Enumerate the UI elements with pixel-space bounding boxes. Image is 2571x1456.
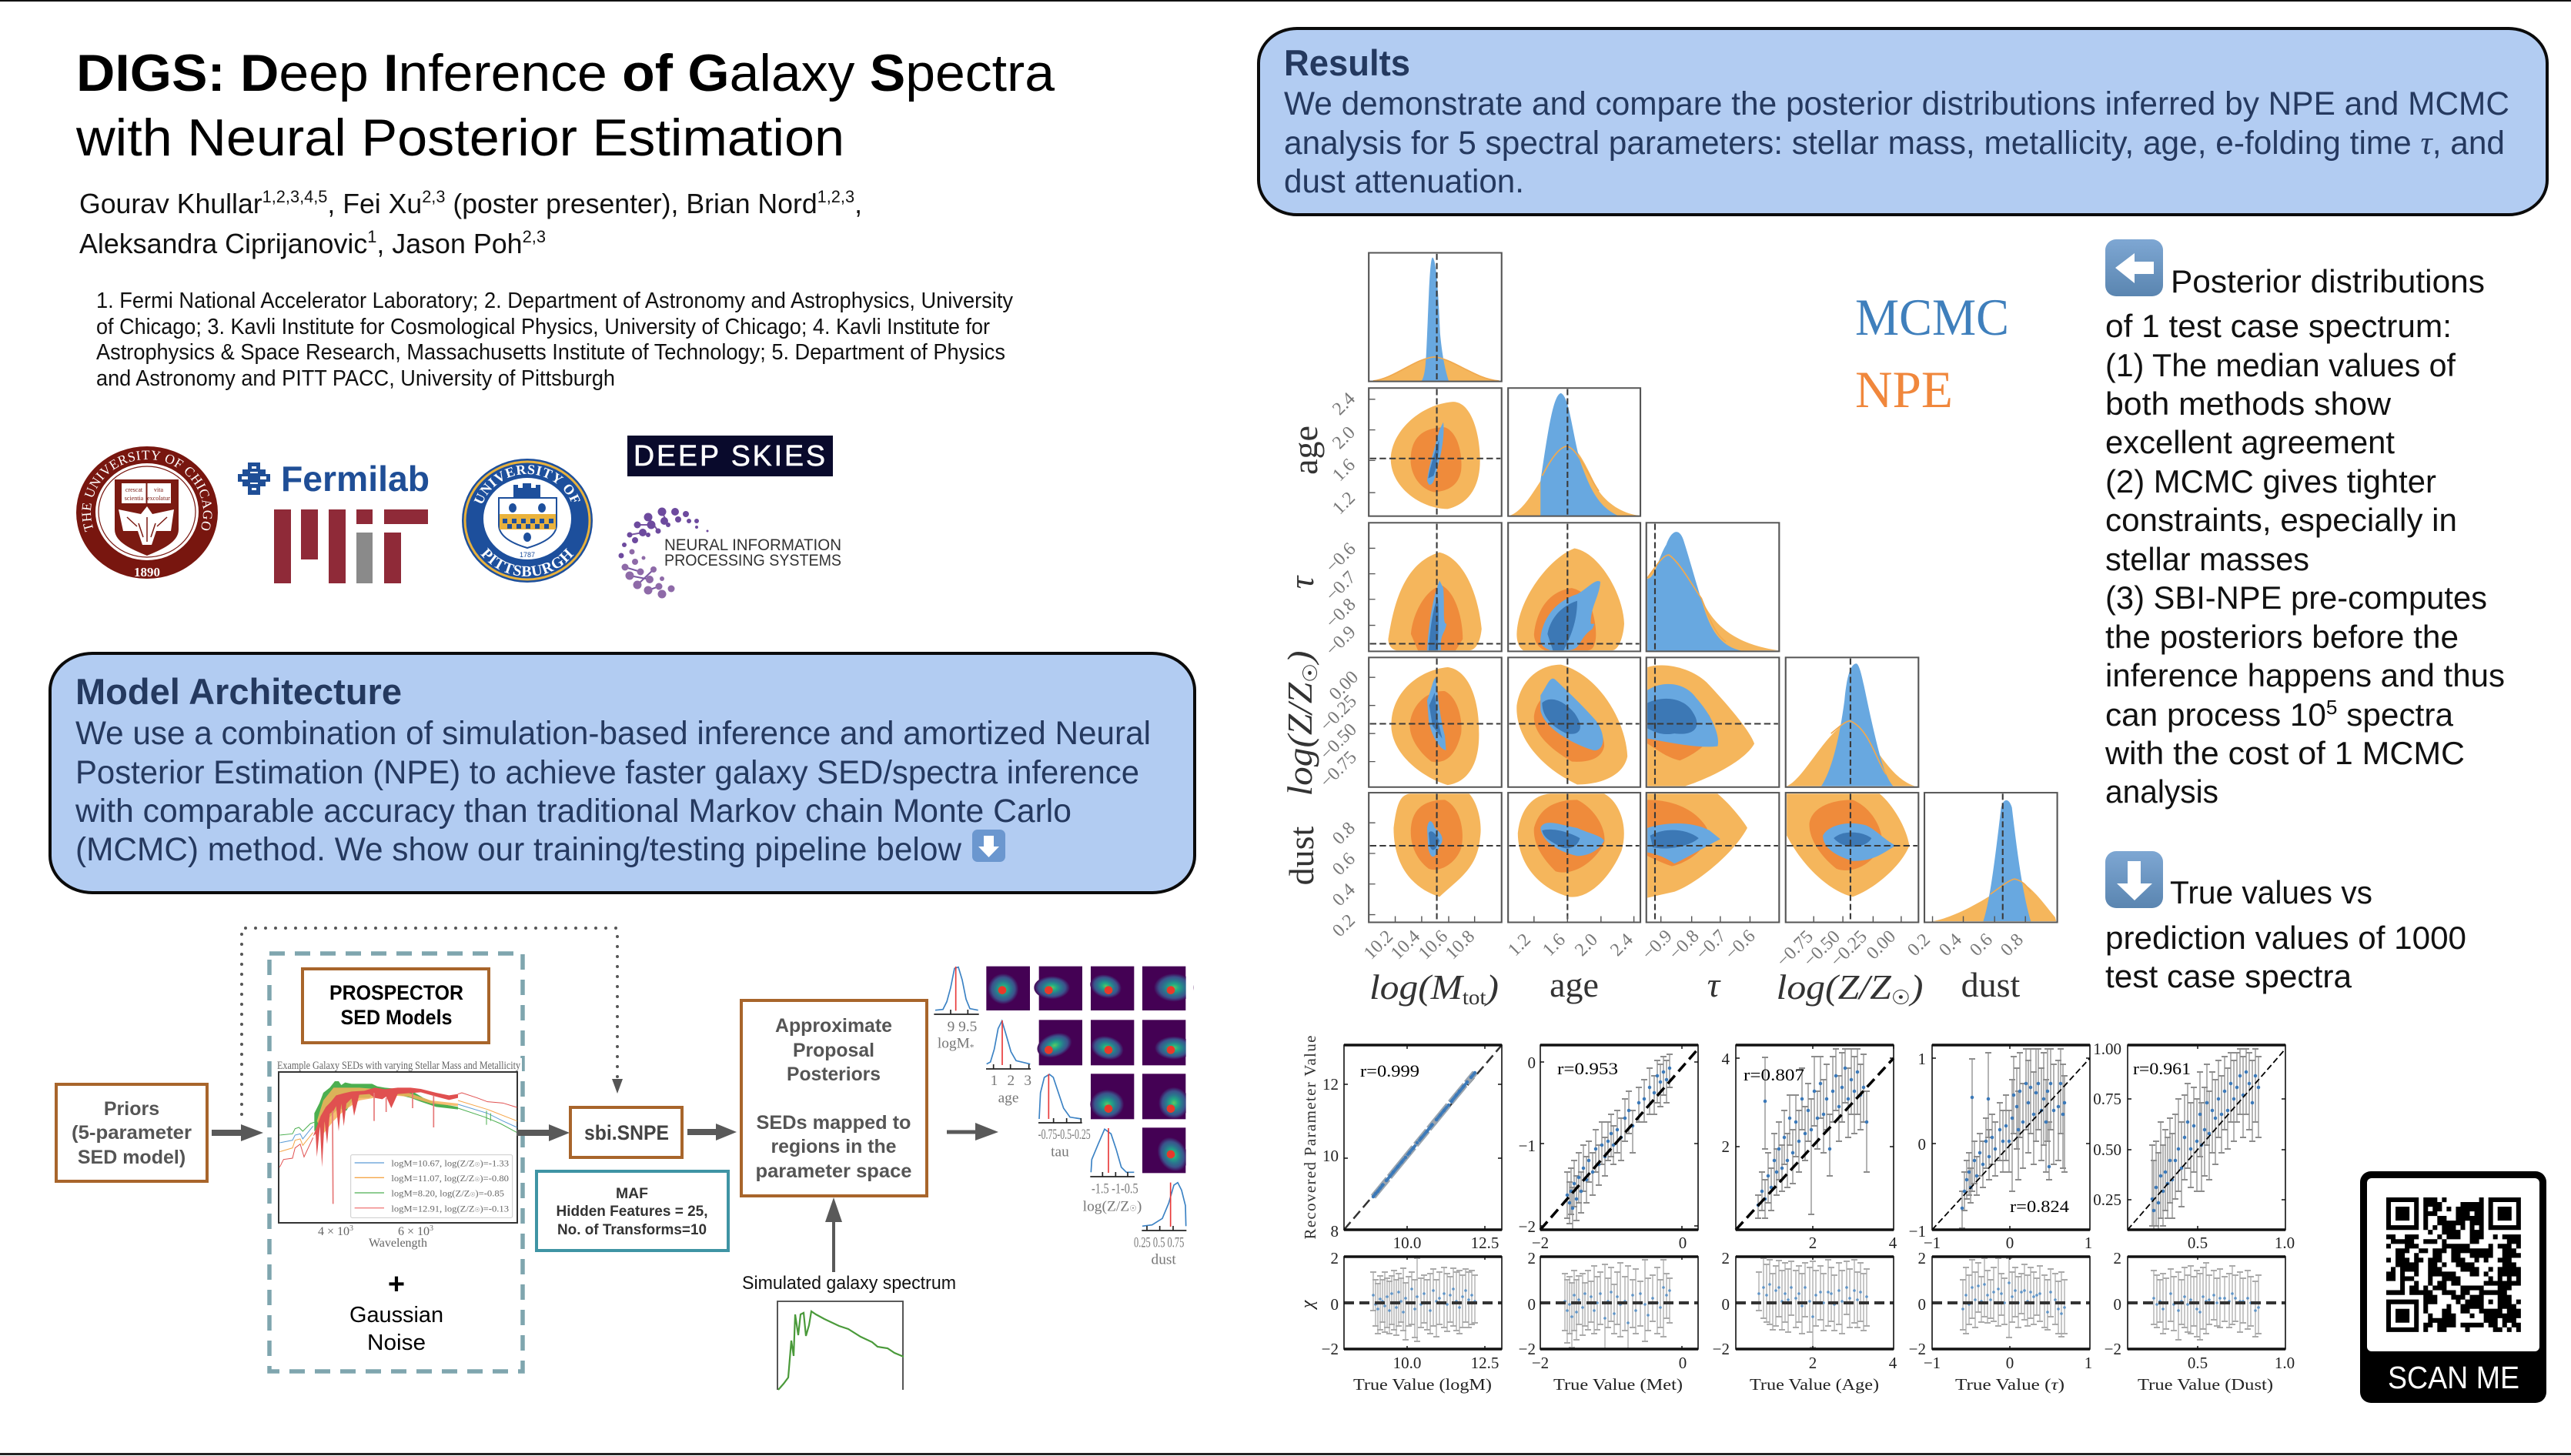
y tick labels: 0 [1918, 1135, 1926, 1154]
legend: logM=12.91, log(Z/Z☉)=-0.13 [391, 1203, 509, 1214]
chart: example galaxy SEDs: Example Galaxy SEDs with varying Stellar Mass and Metallicity [277, 1060, 520, 1072]
text block: posterior explanation: can process 10 [2105, 696, 2325, 733]
scatter panel: tau [1932, 1045, 2090, 1230]
text block: posterior explanation: spectra [2338, 696, 2454, 733]
logo: Neural Information Processing Systems: NEURAL INFORMATION [664, 536, 841, 554]
logo: University of Chicago [76, 446, 218, 579]
text block: results description: analysis for 5 spectral parameters: stellar mass, metallicity, age, e-folding time τ, and [1284, 125, 2505, 162]
corner axis labels: dust [1961, 965, 2021, 1004]
corner tick labels: −0.9 [1322, 622, 1360, 660]
x tick labels: −1 [1924, 1234, 1941, 1252]
corner axis labels: ) [1483, 967, 1499, 1007]
text block: posterior explanation [2105, 239, 2505, 810]
residual panel: Age [1736, 1257, 1894, 1349]
corner axis labels: age [1550, 965, 1599, 1004]
chart: example galaxy SEDs: 4 × 10 [318, 1225, 349, 1238]
label: gaussian noise: Noise [367, 1331, 426, 1355]
panel: dust marginal [1924, 793, 2058, 923]
affiliations: of Chicago; 3. Kavli Institute for Cosmological Physics, University of Chicago; 4. Kavli Institute for [96, 315, 990, 339]
y tick labels: 12 [1322, 1075, 1339, 1094]
corner tick labels: 0.2 [1329, 910, 1359, 941]
corner tick labels: 1.2 [1329, 488, 1359, 519]
authors: 1 [367, 227, 376, 246]
corner tick labels: −0.8 [1665, 926, 1703, 964]
corner tick labels: 1.6 [1329, 455, 1359, 486]
corner axis labels [1280, 426, 2021, 1009]
approximate proposal posteriors box [741, 1000, 927, 1196]
priors box: SED model) [78, 1147, 186, 1168]
corner tick labels: 2.4 [1606, 930, 1637, 960]
x tick labels: 12.5 [1471, 1354, 1499, 1372]
logo: University of Chicago: scientia [125, 495, 144, 502]
affiliations: and Astronomy and PITT PACC, University of Pittsburgh [96, 366, 615, 391]
title [75, 44, 1055, 167]
text block: true values explanation: test case spectra [2105, 958, 2352, 994]
y tick labels: 0 [1330, 1295, 1339, 1314]
marginal histograms [934, 967, 1186, 1231]
legend: logM=8.20, log(Z/Z☉)=-0.85 [391, 1188, 504, 1199]
logo: University of Pittsburgh: PITTSBURGH [480, 548, 574, 576]
text block: posterior explanation: analysis [2105, 773, 2218, 810]
heading: model architecture: Model Architecture [75, 671, 402, 712]
panel: results [1259, 28, 2547, 215]
scatter panel: Dust: r=0.961 [2133, 1059, 2191, 1078]
icon: down arrow [972, 830, 1005, 862]
arrow: priors to SED models [212, 1124, 263, 1141]
x tick labels: 0 [2006, 1354, 2014, 1372]
y tick labels: 10 [1322, 1147, 1339, 1165]
axis labels: dust [1152, 1252, 1176, 1268]
corner tick labels: −0.6 [1721, 926, 1760, 964]
x axis titles: True Value (Age) [1750, 1375, 1879, 1394]
arrow: SED models to sbi.SNPE [517, 1124, 570, 1141]
logo: University of Chicago: 1890 [134, 565, 160, 579]
corner tick labels: −0.50 [1800, 927, 1844, 971]
panel: age vs mass [1369, 388, 1502, 516]
y tick labels: 8 [1330, 1222, 1339, 1241]
axis labels [938, 1019, 1184, 1268]
y tick labels: −1 [1519, 1137, 1536, 1155]
axis labels: 9 9.5 [948, 1019, 977, 1035]
QR code [2360, 1171, 2546, 1403]
corner tick labels: 0.4 [1329, 880, 1359, 910]
corner tick labels: 0.00 [1863, 927, 1900, 963]
y tick labels: 2 [2114, 1249, 2121, 1267]
y tick labels: 0.50 [2093, 1140, 2121, 1159]
x tick labels: 10.0 [1393, 1354, 1421, 1372]
corner axis labels: τ [1707, 965, 1721, 1004]
y tick labels: −2 [1519, 1217, 1536, 1236]
panel: metallicity vs mass [1369, 657, 1502, 787]
residual panel: logM [1344, 1257, 1502, 1349]
x axis titles: True Value (Dust) [2138, 1375, 2273, 1394]
text block: results description [1284, 85, 2509, 200]
corner tick labels: 0.2 [1904, 930, 1934, 960]
axis labels: 1 2 3 [991, 1073, 1031, 1089]
text block: posterior explanation: (2) MCMC gives tighter [2105, 463, 2436, 499]
panel: metallicity marginal [1786, 657, 1918, 787]
x axis titles: True Value (logM) [1353, 1375, 1492, 1394]
scatter panel: logM: r=0.999 [1360, 1061, 1419, 1080]
text block: posterior explanation: stellar masses [2105, 541, 2309, 577]
text block: posterior explanation: (1) The median values of [2105, 347, 2456, 383]
scatter panel: Age: r=0.807 [1744, 1065, 1804, 1084]
logo: University of Pittsburgh: UNIVERSITY OF [474, 465, 580, 503]
x tick labels: 1 [2085, 1354, 2092, 1372]
x tick labels: −2 [1532, 1234, 1549, 1252]
logo: Neural Information Processing Systems [619, 508, 841, 599]
y tick labels: 1 [1918, 1050, 1926, 1068]
authors: , Jason Poh [376, 228, 523, 259]
text block: posterior explanation: both methods show [2105, 386, 2392, 422]
y tick labels: 0 [1918, 1295, 1926, 1314]
legend: MCMC and NPE [1855, 288, 2009, 419]
x tick labels [1393, 1234, 2295, 1372]
corner tick labels: 10.4 [1387, 927, 1424, 963]
corner tick labels [1316, 389, 2028, 971]
text block: true values explanation: prediction values of 1000 [2105, 920, 2466, 956]
corner tick labels: 0.6 [1966, 930, 1997, 960]
MAF box: MAF [616, 1186, 648, 1202]
MAF box: Hidden Features = 25, [556, 1204, 708, 1220]
panel: dust vs mass [1369, 793, 1502, 923]
chart: example galaxy SEDs: Wavelength [369, 1237, 427, 1250]
corner tick labels: 1.2 [1504, 930, 1535, 960]
MAF box [537, 1171, 728, 1251]
text block: model description: Posterior Estimation (NPE) to achieve faster galaxy SED/spectra inference [75, 754, 1139, 791]
corner tick labels: 0.8 [1329, 818, 1359, 849]
panel: metallicity vs age [1508, 657, 1640, 787]
corner tick labels: 10.6 [1415, 927, 1452, 963]
approximate proposal posteriors box: regions in the [771, 1136, 897, 1157]
y tick labels: −2 [1713, 1340, 1730, 1358]
panel: metallicity vs tau [1647, 657, 1779, 787]
text block: posterior explanation: the posteriors before the [2105, 619, 2459, 655]
title: DIGS: Deep Inference of Galaxy Spectra [76, 44, 1055, 102]
text block: posterior explanation: inference happens and thus [2105, 657, 2505, 693]
prospector box [303, 969, 489, 1043]
diagram: training and testing pipeline [56, 928, 1194, 1390]
axis labels: tau [1051, 1144, 1069, 1160]
x tick labels: 1.0 [2275, 1234, 2295, 1252]
sbi.SNPE box [570, 1107, 682, 1157]
corner tick labels: −0.75 [1773, 927, 1817, 971]
corner tick labels: −0.7 [1692, 926, 1730, 964]
y tick labels: −2 [1519, 1340, 1536, 1358]
corner tick labels: −0.75 [1316, 747, 1361, 792]
affiliations: Astrophysics & Space Research, Massachusetts Institute of Technology; 5. Department of Physics [96, 340, 1005, 365]
text block: posterior explanation: (3) SBI-NPE pre-computes [2105, 579, 2487, 616]
authors: 2,3 [523, 227, 546, 246]
corner tick labels: −0.25 [1316, 691, 1361, 736]
y tick labels: 2 [1721, 1137, 1730, 1156]
x tick labels: 10.0 [1393, 1234, 1421, 1252]
y tick labels: 0.25 [2093, 1191, 2121, 1209]
logo: University of Pittsburgh: 1787 [520, 551, 535, 559]
approximate proposal posteriors box: parameter space [756, 1160, 912, 1182]
icon: left arrow [2105, 239, 2163, 296]
text block: model description [75, 715, 1151, 868]
panel: model architecture [50, 653, 1195, 893]
priors box: Priors [104, 1098, 159, 1120]
authors: 1,2,3,4,5 [262, 187, 327, 206]
y tick labels: 1.00 [2093, 1040, 2121, 1058]
axis labels: -0.75-0.5-0.25 [1038, 1127, 1091, 1143]
axis labels: * [970, 1043, 975, 1052]
y tick labels: 2 [1721, 1249, 1730, 1267]
panel: dust vs age [1508, 793, 1640, 923]
x tick labels: 0 [1679, 1234, 1687, 1252]
affiliations: 1. Fermi National Accelerator Laboratory; 2. Department of Astronomy and Astrophysics, University [96, 289, 1013, 313]
corner axis labels: age [1286, 426, 1325, 475]
residual panel: Dust [2128, 1257, 2285, 1349]
text block: true values explanation [2105, 851, 2466, 994]
corner tick labels: 10.2 [1360, 927, 1397, 963]
x tick labels: 4 [1889, 1234, 1897, 1252]
chart: mini corner plot [934, 964, 1194, 1268]
corner tick labels: −0.6 [1322, 539, 1360, 577]
logo: University of Pittsburgh [462, 459, 593, 583]
MAF box: No. of Transforms=10 [557, 1222, 707, 1238]
chart: simulated spectrum [777, 1301, 904, 1390]
approximate proposal posteriors box: Approximate [775, 1015, 892, 1037]
y tick labels: −2 [1909, 1340, 1926, 1358]
corner tick labels: −0.25 [1827, 927, 1871, 971]
corner axis labels: dust [1282, 826, 1321, 885]
scatter panel: tau: r=0.824 [2010, 1197, 2069, 1216]
scatter panel: Dust [2128, 1045, 2285, 1230]
label: simulated galaxy spectrum: Simulated galaxy spectrum [742, 1273, 956, 1294]
posterior density images [986, 964, 1194, 1177]
axis title: chi: χ [1298, 1299, 1318, 1310]
authors: Gourav Khullar [79, 188, 264, 219]
approximate proposal posteriors box: SEDs mapped to [756, 1112, 911, 1134]
prospector box: SED Models [340, 1006, 453, 1029]
priors box: (5-parameter [72, 1122, 192, 1144]
corner tick labels: 0.00 [1326, 667, 1362, 704]
x tick labels: 0 [2006, 1234, 2014, 1252]
logo: University of Chicago: THE UNIVERSITY OF CHICAGO [82, 450, 212, 533]
x axis titles [1353, 1375, 2273, 1394]
x tick labels: 0 [1679, 1354, 1687, 1372]
axis labels: log(Z/Z☉) [1083, 1198, 1142, 1214]
axis labels: 0.25 0.5 0.75 [1134, 1235, 1184, 1251]
scatter panel: Met [1540, 1045, 1698, 1230]
corner axis labels: log(Z/Z [1280, 690, 1319, 796]
y tick labels: −1 [1909, 1222, 1926, 1241]
axis labels: logM [938, 1036, 970, 1052]
chart: example galaxy SEDs: 6 × 10 [398, 1225, 430, 1238]
x axis titles: True Value ( τ) [1955, 1375, 2064, 1394]
legend: logM=11.07, log(Z/Z ☉)=-0.80 [391, 1173, 509, 1184]
corner axis labels: log(M [1369, 967, 1456, 1007]
panel: dust vs tau [1647, 793, 1779, 923]
legend: logM=10.67, log(Z/Z☉)=-1.33 [391, 1158, 509, 1169]
axis title: recovered parameter value: Recovered Parameter Value [1301, 1036, 1319, 1239]
x tick labels: 1 [2085, 1234, 2092, 1252]
prospector box: PROSPECTOR [329, 981, 463, 1004]
text block: posterior explanation: constraints, especially in [2105, 502, 2457, 538]
arrow: sbi.SNPE to posteriors [687, 1124, 737, 1140]
residual panel: Met [1540, 1257, 1698, 1349]
legend [351, 1155, 513, 1217]
panel: tau marginal [1647, 523, 1779, 651]
text block: model description: (MCMC) method. We show our training/testing pipeline below [75, 831, 962, 868]
y tick labels: 0 [1527, 1295, 1536, 1314]
corner tick labels: 0.8 [1997, 930, 2028, 960]
corner axis labels: ) [1908, 967, 1923, 1007]
legend: MCMC and NPE: MCMC [1855, 288, 2009, 346]
x tick labels: 4 [1889, 1354, 1897, 1372]
y tick labels: −2 [2105, 1340, 2121, 1358]
y tick labels: 2 [1918, 1249, 1926, 1267]
corner tick labels: 2.4 [1329, 389, 1359, 419]
text block: true values explanation: True values vs [2170, 874, 2372, 910]
chart: example galaxy SEDs: 3 [430, 1224, 433, 1233]
y tick labels: 2 [1330, 1249, 1339, 1267]
arrow: spectrum to posteriors [825, 1197, 842, 1272]
corner axis labels: ☉ [1299, 663, 1322, 683]
legend: MCMC and NPE: NPE [1855, 360, 1953, 419]
corner tick labels: −0.50 [1316, 720, 1361, 764]
label: gaussian noise: + [388, 1268, 405, 1301]
arrow: dotted feedback to sbi.SNPE [242, 928, 623, 1114]
sbi.SNPE box: sbi.SNPE [584, 1121, 669, 1144]
corner tick labels: −0.9 [1638, 926, 1677, 964]
scatter panel: Age [1736, 1045, 1894, 1230]
title: with Neural Posterior Estimation [75, 109, 844, 167]
corner tick labels: −0.8 [1322, 594, 1360, 633]
x tick labels: 0.5 [2188, 1234, 2208, 1252]
x tick labels: 2 [1809, 1234, 1817, 1252]
text block: posterior explanation: Posterior distributions [2171, 263, 2485, 299]
logo: University of Chicago: excolatur [147, 495, 170, 502]
text block: posterior explanation: with the cost of 1 MCMC [2105, 735, 2465, 771]
y tick labels [1322, 1040, 2121, 1358]
authors [79, 187, 862, 259]
corner tick labels: −0.7 [1322, 567, 1360, 606]
y tick labels: 0 [1721, 1295, 1730, 1314]
corner tick labels: 1.6 [1539, 930, 1570, 960]
x tick labels: −1 [1924, 1354, 1941, 1372]
authors: (poster presenter), Brian Nord [445, 188, 817, 219]
y tick labels: 2 [1527, 1249, 1536, 1267]
panel: log mass marginal [1369, 253, 1502, 382]
authors: 2,3 [422, 187, 445, 206]
x tick labels: 12.5 [1471, 1234, 1499, 1252]
x axis titles: True Value (Met) [1553, 1375, 1683, 1394]
corner axis labels: ) [1280, 651, 1319, 666]
icon: down arrow [2105, 851, 2163, 908]
chart: example galaxy SEDs [274, 1058, 522, 1250]
corner axis labels: log(Z/Z [1777, 967, 1883, 1007]
corner axis labels: ☉ [1891, 987, 1911, 1009]
text block: model description: We use a combination of simulation-based inference and amortized Neural [75, 715, 1151, 752]
logo: University of Chicago: vita [154, 486, 163, 493]
label: scan me: SCAN ME [2388, 1360, 2519, 1395]
text block: results description: We demonstrate and compare the posterior distributions inferred by NPE and MCMC [1284, 85, 2509, 122]
corner axis labels: tot [1463, 986, 1486, 1009]
heading: results: Results [1284, 42, 1410, 83]
label: gaussian noise [349, 1268, 443, 1355]
logo: Fermilab: Fermilab [281, 459, 430, 499]
panel: tau vs age [1508, 523, 1640, 651]
corner tick labels: 10.8 [1442, 927, 1479, 963]
panel: age marginal [1508, 388, 1640, 516]
y tick labels: −2 [1322, 1340, 1339, 1358]
authors: 1,2,3 [817, 187, 854, 206]
chart: example galaxy SEDs: 3 [349, 1224, 353, 1233]
scatter panel: Met: r=0.953 [1557, 1059, 1618, 1078]
corner axis labels: τ [1282, 575, 1321, 589]
text block: posterior explanation: 5 [2326, 696, 2338, 719]
logo: Deep Skies: DEEP SKIES [634, 440, 827, 473]
axis labels: age [998, 1090, 1018, 1106]
x tick labels: −2 [1532, 1354, 1549, 1372]
logo: Neural Information Processing Systems: PROCESSING SYSTEMS [664, 552, 841, 569]
chart: true vs recovered values [1298, 1036, 2295, 1394]
label: gaussian noise: Gaussian [349, 1303, 443, 1327]
authors: , Fei Xu [327, 188, 422, 219]
text block: posterior explanation: excellent agreement [2105, 424, 2395, 460]
authors: Aleksandra Ciprijanovic [79, 228, 369, 259]
dashed box: SED generation [269, 953, 523, 1371]
scatter panel: logM [1344, 1045, 1502, 1230]
text block: model description: with comparable accuracy than traditional Markov chain Monte Carlo [75, 793, 1072, 830]
axis labels: -1.5 -1-0.5 [1092, 1181, 1138, 1197]
text block: posterior explanation: of 1 test case spectrum: [2105, 308, 2452, 344]
text block: results description: dust attenuation. [1284, 163, 1524, 200]
residual panel: tau [1932, 1257, 2090, 1349]
x tick labels: 0.5 [2188, 1354, 2208, 1372]
panel: dust vs metallicity [1786, 793, 1918, 923]
corner tick labels: 2.0 [1571, 930, 1602, 960]
panel: tau vs mass [1369, 523, 1502, 651]
x tick labels: 1.0 [2275, 1354, 2295, 1372]
y tick labels: 0 [2114, 1295, 2121, 1314]
corner tick labels: 0.6 [1329, 849, 1359, 880]
y tick labels: 4 [1721, 1050, 1730, 1068]
authors: , [854, 188, 862, 219]
priors box [56, 1084, 207, 1181]
affiliations [96, 289, 1013, 391]
arrow: posteriors to corner [947, 1123, 998, 1140]
y tick labels: 0.75 [2093, 1090, 2121, 1108]
approximate proposal posteriors box: Posteriors [787, 1064, 881, 1085]
logo: University of Chicago: crescat [125, 486, 143, 493]
y tick labels: 0 [1527, 1054, 1536, 1072]
corner tick labels: 2.0 [1329, 422, 1359, 453]
chart: corner plot comparing MCMC and NPE [1280, 253, 2058, 1009]
logo: MIT [274, 509, 428, 583]
corner tick labels: 0.4 [1935, 930, 1966, 960]
approximate proposal posteriors box: Proposal [793, 1040, 874, 1061]
x tick labels: 2 [1809, 1354, 1817, 1372]
